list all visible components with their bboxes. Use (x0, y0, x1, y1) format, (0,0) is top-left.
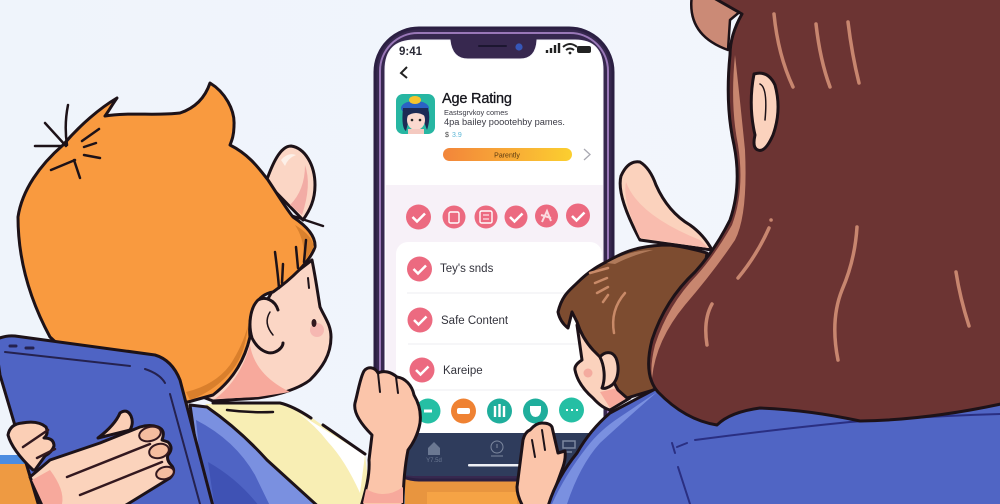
boy's hand on the tablet (8, 411, 175, 504)
boy face (200, 260, 331, 401)
action buttons row (386, 395, 603, 433)
back arrow (401, 67, 407, 78)
woman's ear (751, 73, 778, 150)
younger child (558, 245, 707, 410)
child face (575, 300, 640, 410)
app icon (396, 94, 435, 134)
phone body (375, 28, 613, 480)
status bar: 9:41 (399, 46, 423, 58)
table behind the figures (0, 455, 530, 504)
checklist item 1 (407, 256, 494, 282)
woman (547, 0, 1000, 504)
boy hair (18, 83, 315, 402)
description: 3.9 (452, 132, 462, 139)
bottom navigation: Y7.5d (426, 458, 442, 464)
phone screen (385, 40, 603, 434)
tablet held by the boy (0, 336, 214, 504)
heading: Age Rating (442, 91, 512, 107)
description: $ (445, 132, 449, 139)
description: Eastsgrvkoy comes (444, 108, 508, 117)
checklist card (396, 242, 602, 417)
boy near ear (250, 298, 283, 353)
child hair (558, 245, 707, 398)
boy body and shirt (190, 403, 372, 504)
checklist item 3: Kareipe (443, 365, 483, 377)
woman's thumb (620, 162, 712, 250)
description (444, 108, 565, 139)
woman's hair (649, 0, 1000, 425)
boy's raised hand on the phone (355, 368, 420, 504)
description: 4pa bailey poootehby pames. (444, 117, 565, 127)
checklist item 1: Tey's snds (440, 263, 494, 275)
smartphone (375, 28, 613, 480)
hair strands (706, 14, 969, 360)
status bar (399, 43, 591, 58)
child ear (600, 353, 618, 388)
checklist item 3 (410, 358, 483, 382)
checklist item 2 (408, 308, 509, 332)
boy hair tuft lines (35, 105, 323, 288)
boy far ear (266, 146, 315, 220)
woman's blue top (547, 380, 1000, 504)
child's hand on the phone (517, 423, 565, 504)
boy with orange hair (18, 83, 372, 504)
category icons row (406, 204, 590, 230)
bottom navigation (385, 433, 603, 476)
rating bar: Parently (494, 152, 520, 160)
rating bar (443, 148, 590, 161)
checklist item 2: Safe Content (441, 315, 509, 327)
